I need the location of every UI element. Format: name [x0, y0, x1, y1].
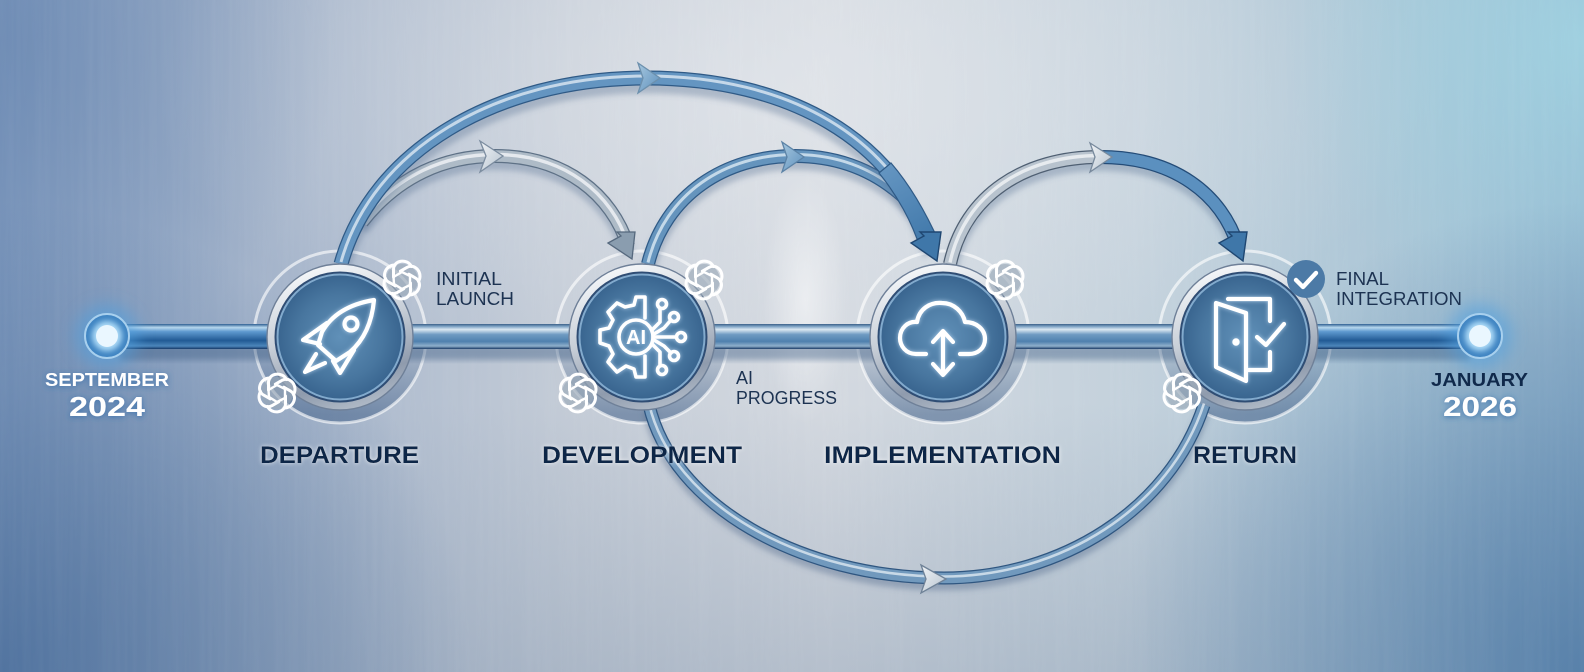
- note: final integration: [1336, 269, 1462, 309]
- stage title: development: DEVELOPMENT: [542, 442, 742, 469]
- icon: rocket: [303, 300, 374, 373]
- arrowhead: at return node: [1219, 232, 1247, 261]
- icon: AI gear: [600, 297, 686, 377]
- icon: knot badge, return lower: [1161, 374, 1203, 412]
- icon: knot badge, development upper: [683, 261, 725, 299]
- note: AI progress: PROGRESS: [736, 388, 837, 408]
- icon: knot badge, implementation upper: [984, 261, 1026, 299]
- arc: development to return, lower loop: [649, 404, 1204, 593]
- icon: cloud with up and down arrows: [900, 303, 985, 375]
- arc: departure to development: [362, 141, 635, 259]
- arrowhead: middle of arc: [480, 141, 503, 172]
- stage title: return: RETURN: [1193, 442, 1297, 469]
- arc: departure to implementation, top loop: [341, 63, 941, 272]
- node: return: [1172, 264, 1318, 410]
- label: start date: [45, 370, 169, 422]
- label: end date: [1431, 370, 1528, 422]
- note: initial launch: [436, 269, 514, 309]
- arc: development to implementation: [648, 142, 912, 271]
- label: end date: JANUARY: [1431, 370, 1528, 390]
- start marker: [75, 304, 139, 368]
- icon: check badge: [1287, 260, 1325, 298]
- icon: knot badge, departure lower: [256, 374, 298, 412]
- arrowhead: middle of arc: [782, 142, 804, 172]
- timeline bar: [110, 324, 1473, 360]
- note: initial launch: LAUNCH: [436, 289, 514, 309]
- note: AI progress: [736, 368, 837, 408]
- note: final integration: INTEGRATION: [1336, 289, 1462, 309]
- icon: knot badge, departure upper: [381, 261, 423, 299]
- icon: AI gear: AI: [626, 327, 646, 349]
- note: initial launch: INITIAL: [436, 269, 502, 289]
- arrowhead: middle of arc: [1090, 143, 1112, 172]
- arc: implementation to return: [950, 143, 1247, 271]
- stage title: departure: DEPARTURE: [260, 442, 419, 469]
- label: start date: 2024: [69, 391, 146, 422]
- arrowhead: at development node: [608, 232, 635, 259]
- label: start date: SEPTEMBER: [45, 370, 169, 390]
- stage title: implementation: IMPLEMENTATION: [824, 442, 1061, 469]
- end marker: [1448, 304, 1512, 368]
- label: end date: 2026: [1443, 391, 1517, 422]
- node halo rings: [254, 251, 1331, 423]
- note: AI progress: AI: [736, 368, 753, 388]
- icon: knot badge, development lower: [557, 374, 599, 412]
- arrowhead: top of arc: [638, 63, 660, 93]
- arrowhead: lower loop: [921, 565, 946, 593]
- node: departure: [267, 264, 413, 410]
- node: development: [569, 264, 715, 410]
- node: implementation: [870, 264, 1016, 410]
- icon: door with check: [1216, 299, 1284, 381]
- note: final integration: FINAL: [1336, 269, 1389, 289]
- arrowhead: at implementation node: [911, 232, 941, 261]
- tapered shaft before arrowhead: [879, 163, 940, 249]
